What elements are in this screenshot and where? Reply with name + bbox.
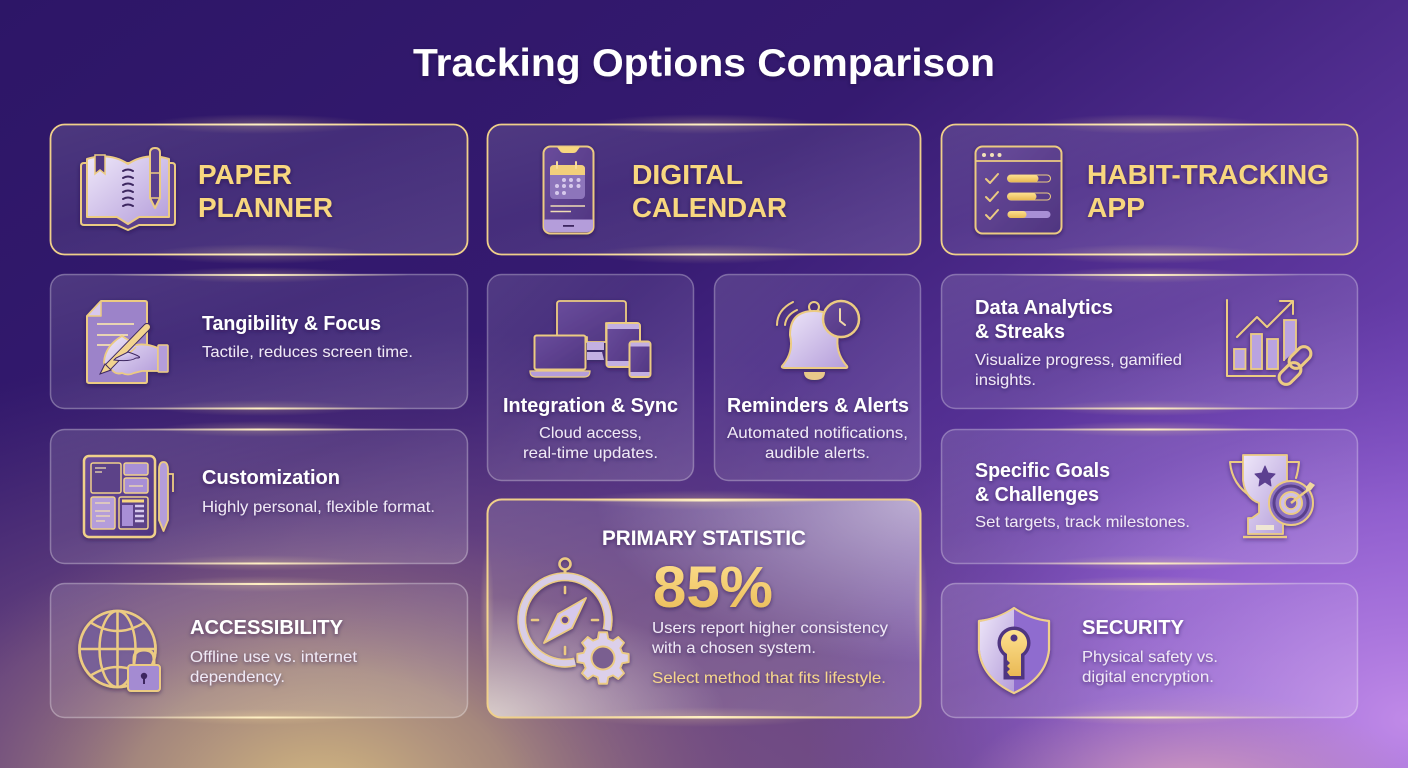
panel: primary statistic	[480, 490, 928, 727]
text: statistic description: Users report higher consistency	[652, 620, 888, 637]
heading: digital calendar: CALENDAR	[632, 192, 787, 223]
icon: trophy with target	[1230, 455, 1315, 537]
text: reminders and alerts: Automated notifications,	[727, 425, 908, 442]
heading: digital calendar: DIGITAL	[632, 159, 743, 190]
heading: habit-tracking app: HABIT-TRACKING	[1087, 159, 1329, 190]
heading: paper planner: PLANNER	[198, 192, 333, 223]
statistic: 85%: 85%	[653, 555, 773, 620]
text: accessibility: Offline use vs. internet	[190, 649, 358, 666]
heading: digital calendar	[632, 159, 787, 223]
text: statistic description: with a chosen system.	[651, 640, 816, 657]
icon: bar chart with link	[1227, 300, 1314, 387]
icon: app window with checklist	[976, 146, 1062, 234]
panel: security	[942, 576, 1358, 725]
title: Tracking Options Comparison	[413, 42, 995, 85]
text: integration and sync: Integration & Sync	[503, 395, 678, 417]
text: customization	[202, 467, 435, 516]
heading: paper planner	[198, 159, 333, 223]
icon: bell with clock	[777, 301, 859, 380]
text: statistic description	[651, 620, 888, 687]
text: accessibility: ACCESSIBILITY	[190, 617, 344, 639]
panel: habit-tracking app header	[942, 114, 1358, 264]
text: specific goals and challenges	[975, 460, 1190, 531]
text: specific goals and challenges: Specific Goals	[975, 460, 1110, 482]
text: data analytics and streaks: Visualize progress, gamified	[975, 352, 1182, 369]
panel: customization	[50, 421, 468, 571]
text: reminders and alerts: Reminders & Alerts	[727, 395, 909, 417]
heading: habit-tracking app	[1087, 159, 1329, 223]
panel: accessibility	[50, 576, 468, 725]
text: data analytics and streaks: insights.	[975, 372, 1036, 389]
text: specific goals and challenges: & Challenges	[975, 484, 1099, 506]
heading: paper planner: PAPER	[198, 159, 292, 190]
text: tangibility and focus: Tangibility & Focus	[202, 313, 381, 335]
text: integration and sync: real-time updates.	[523, 445, 658, 462]
text: specific goals and challenges: Set targets, track milestones.	[975, 514, 1190, 531]
icon: planner layout with pen	[84, 456, 173, 537]
panel: integration and sync	[488, 274, 694, 480]
text: security: digital encryption.	[1082, 669, 1214, 686]
icon: synced devices	[530, 301, 650, 377]
text: integration and sync	[503, 395, 678, 462]
icon: compass with gear	[522, 558, 629, 684]
text: security: SECURITY	[1082, 617, 1185, 639]
text: security	[1082, 617, 1218, 686]
panel: specific goals and challenges	[942, 421, 1358, 571]
text: statistic description: Select method that fits lifestyle.	[652, 670, 886, 687]
heading: primary statistic: PRIMARY STATISTIC	[602, 527, 806, 550]
text: reminders and alerts: audible alerts.	[765, 445, 870, 462]
text: security: Physical safety vs.	[1082, 649, 1218, 666]
icon: shield with key	[979, 608, 1049, 693]
panel: paper planner header	[50, 114, 468, 264]
text: data analytics and streaks	[975, 297, 1182, 389]
text: reminders and alerts	[727, 395, 909, 462]
text: tangibility and focus	[202, 313, 413, 361]
panel: tangibility and focus	[50, 267, 468, 416]
icon: hand writing on paper	[87, 301, 168, 383]
panel: reminders and alerts	[714, 274, 920, 480]
icon: phone calendar	[544, 146, 594, 234]
icon: globe with padlock	[80, 611, 160, 691]
text: integration and sync: Cloud access,	[539, 425, 642, 442]
panel: data analytics and streaks	[942, 267, 1358, 416]
panel: digital calendar header	[488, 114, 920, 264]
text: accessibility: dependency.	[190, 669, 285, 686]
icon: open planner with pen	[81, 148, 175, 230]
text: data analytics and streaks: Data Analytics	[975, 297, 1113, 319]
text: accessibility	[190, 617, 358, 686]
text: tangibility and focus: Tactile, reduces screen time.	[202, 344, 413, 361]
heading: habit-tracking app: APP	[1087, 192, 1145, 223]
text: data analytics and streaks: & Streaks	[975, 321, 1065, 343]
text: customization: Highly personal, flexible format.	[202, 499, 435, 516]
text: customization: Customization	[202, 467, 340, 489]
